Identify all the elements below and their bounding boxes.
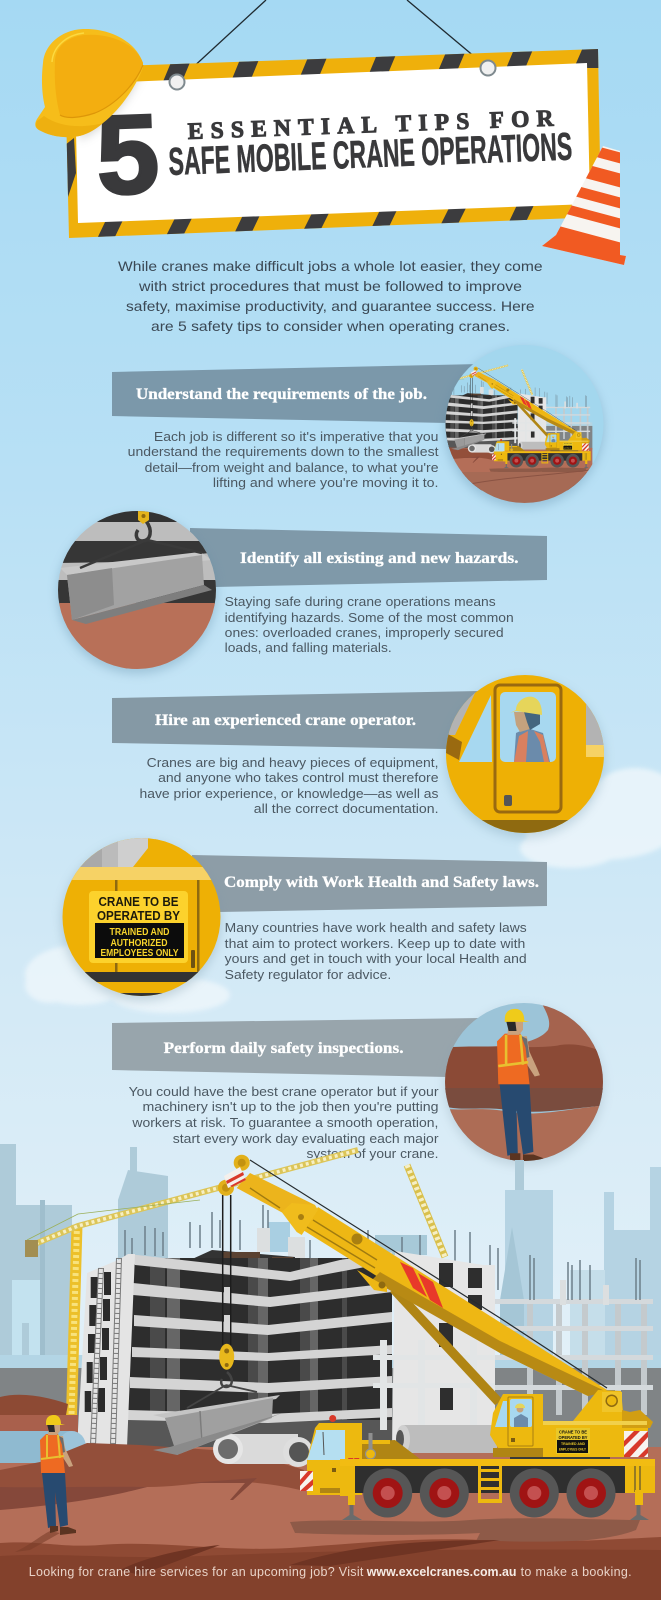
foreground dirt band [0,1537,661,1600]
sign text [95,894,184,959]
deck and chassis [340,1459,655,1520]
panel: tip 1 [112,340,610,512]
floor slabs [128,1252,392,1423]
mini warning sign: OPERATED BY [558,1435,588,1440]
body 1: detail—from weight and balance, to what you're [145,460,438,475]
windows band [128,1258,392,1453]
mini warning sign [556,1428,590,1454]
clouds [25,768,661,1013]
circle image: crane on site [441,345,607,511]
title sign [65,45,601,241]
hazard stripes [65,45,600,241]
body 2: ones: overloaded cranes, improperly secured [225,625,504,640]
circle image: worker inspecting [442,1003,606,1168]
heading 4: Comply with Work Health and Safety laws. [224,874,539,891]
body 5: workers at risk. To guarantee a smooth operation, [131,1115,438,1130]
grey pipe behind crane [396,1425,497,1453]
body 1: lifting and where you're moving it to. [213,475,438,490]
grommets [170,60,496,90]
truck cab [300,1415,420,1495]
body 1 [128,429,439,490]
intro text: While cranes make difficult jobs a whole lot easier, they come [118,258,543,274]
body 4: Many countries have work health and safety laws [225,920,527,935]
suspended beam [153,1195,282,1455]
sign text: EMPLOYEES ONLY [100,948,179,959]
hanging ropes [177,0,488,82]
sign panel [75,63,590,223]
icon: hard hat [35,29,143,137]
vest [40,1434,65,1473]
body 2 [225,594,514,655]
worker [15,1415,76,1552]
body 4: that aim to protect workers. Keep up to date with [225,936,525,951]
concrete stubs [257,1228,609,1305]
sign board [65,49,601,238]
body 2: identifying hazards. Some of the most common [225,610,514,625]
body 3: all the correct documentation. [254,801,438,816]
right arm [57,1436,73,1467]
body 3: Cranes are big and heavy pieces of equipment, [147,755,438,770]
body 4: yours and get in touch with your local Health and [225,951,527,966]
second tower crane [407,1165,445,1257]
sign text: OPERATED BY [97,908,180,923]
circle image: warning sign on crane [60,835,225,1001]
body 5: system of your crane. [306,1146,438,1161]
superstructure [510,1390,653,1460]
circle image: operator in cab [440,670,610,840]
panel: tip 3 [112,670,610,840]
concrete pipes [213,1434,313,1467]
sign text: CRANE TO BE [98,894,179,909]
body 5: machinery isn't up to the job then you're putting [142,1099,438,1114]
mini warning sign: TRAINED AND [561,1442,585,1446]
mini warning sign: EMPLOYEES ONLY [559,1448,587,1452]
side wall [77,1254,135,1447]
horizon band [0,1355,661,1368]
intro text: safety, maximise productivity, and guarantee success. Here [126,298,535,314]
rear warning stripes [624,1431,648,1457]
body 1: understand the requirements down to the smallest [128,444,439,459]
mobile crane [218,1155,655,1520]
banner 4 [192,855,547,914]
body 3 [140,755,439,816]
panel: tip 2 [55,508,547,674]
panel: tip 5 [112,1003,606,1168]
body 3: have prior experience, or knowledge—as well as [140,786,439,801]
circle image: suspended steel beam [55,508,220,674]
heading line 1: ESSENTIAL TIPS FOR [187,106,555,145]
ladders [90,1258,122,1445]
body 2: loads, and falling materials. [225,640,392,655]
body 1: Each job is different so it's imperative that you [154,429,438,444]
body 5: You could have the best crane operator but if your [129,1084,439,1099]
heading 1: Understand the requirements of the job. [136,386,427,403]
mound shadow [0,1478,257,1510]
numeral 5: 5 [94,91,161,218]
shoes [50,1526,76,1535]
right wing [392,1251,495,1453]
left pale pipe [0,1431,86,1463]
body 4 [225,920,527,982]
icon: traffic cone [542,146,626,265]
body 2: Staying safe during crane operations means [225,594,496,609]
footer call to action: to make a booking. [521,1565,632,1579]
hat shadow on sign [76,82,142,141]
front mound [0,1443,304,1507]
footer call to action: www.excelcranes.com.au [366,1565,516,1579]
banner 1 [112,364,480,423]
tower crane [25,1150,358,1432]
boom head [218,1155,250,1196]
ground base [0,1395,661,1600]
intro text: are 5 safety tips to consider when operating cranes. [151,318,510,334]
intro text: with strict procedures that must be followed to improve [138,278,522,294]
body 5 [129,1084,439,1161]
wheels [363,1468,616,1518]
boom cable [250,1160,607,1388]
hard hat [46,1415,65,1425]
intro text [118,258,543,334]
banner 2 [190,528,547,590]
boom [237,1173,607,1396]
main building [77,1250,495,1453]
body 3: and anyone who takes control must therefore [158,770,438,785]
body 4: Safety regulator for advice. [225,967,391,982]
operator cab [490,1394,543,1457]
legs [42,1473,68,1528]
boom strut [390,1287,503,1405]
banner 5 [112,1018,480,1077]
construction site scene [0,1150,661,1600]
rebar [125,1205,640,1300]
banner 3 [112,691,480,749]
roof dark block [190,1250,295,1277]
panel: tip 4 [60,835,547,1001]
neck and head [48,1424,60,1435]
concrete slabs lower right [373,1340,495,1430]
heading 3: Hire an experienced crane operator. [155,712,416,729]
sign text: TRAINED AND [110,927,170,938]
sign plate [89,891,188,963]
access ladder [478,1466,502,1503]
distant grey ground band [0,1368,661,1453]
heading 2: Identify all existing and new hazards. [240,550,519,567]
sign text: AUTHORIZED [110,938,168,949]
distant city skyline [0,1144,661,1400]
footer call to action [29,1565,632,1579]
footer call to action: Looking for crane hire services for an upcoming job? Visit [29,1565,364,1579]
mini warning sign: CRANE TO BE [559,1430,587,1434]
heading 5: Perform daily safety inspections. [164,1040,404,1057]
ground shadow under crane [290,1518,640,1543]
concrete frame right [493,1299,653,1415]
body 5: start every work day evaluating each major [173,1131,439,1146]
